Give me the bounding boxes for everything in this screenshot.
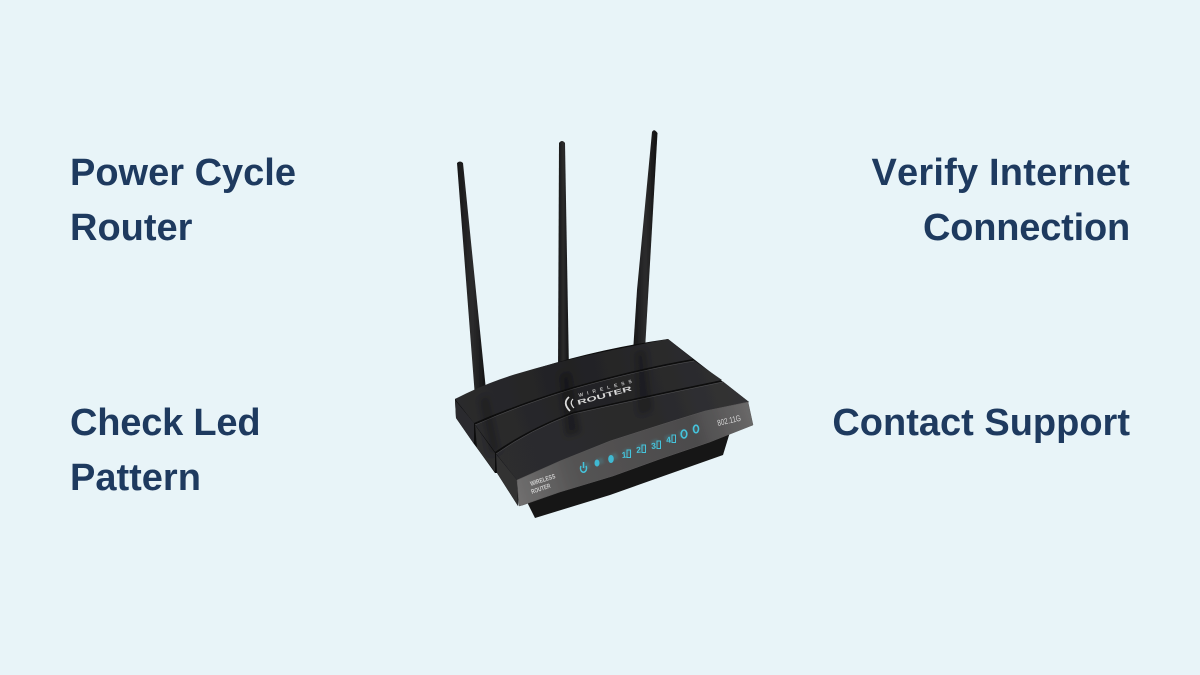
model label: 802.11G <box>716 413 742 428</box>
front panel label: ROUTER <box>530 483 552 496</box>
left side faces <box>455 400 474 444</box>
front panel <box>517 402 753 506</box>
left antenna <box>457 162 487 410</box>
top segment front <box>496 382 749 480</box>
label: power cycle router: Power Cycle <box>70 152 296 194</box>
LED globe <box>681 430 687 438</box>
LED port 4: 4 <box>666 434 672 445</box>
LED power <box>580 462 586 472</box>
label: power cycle router <box>70 152 296 249</box>
shell backing <box>455 339 749 506</box>
label: check led pattern: Check Led <box>70 402 260 444</box>
middle antenna <box>558 141 569 375</box>
label: power cycle router: Router <box>70 207 192 249</box>
label: check led pattern: Pattern <box>70 457 201 499</box>
top segment middle <box>475 360 722 452</box>
brand logo: ROUTER <box>577 386 633 407</box>
status LEDs <box>580 425 698 472</box>
router body <box>455 339 753 518</box>
front panel label: WIRELESS <box>529 473 557 488</box>
right antenna <box>633 130 658 352</box>
label: verify internet connection: Connection <box>923 207 1130 249</box>
LED glow <box>583 429 696 467</box>
brand logo <box>566 379 633 411</box>
LED bluetooth <box>608 455 614 463</box>
front panel label <box>529 473 557 496</box>
LED port 3: 3 <box>651 440 657 451</box>
LED wifi <box>594 460 600 466</box>
label: contact support: Contact Support <box>832 402 1130 444</box>
groove highlights <box>475 361 694 425</box>
label: check led pattern <box>70 402 260 499</box>
label: verify internet connection: Verify Internet <box>871 152 1130 194</box>
antenna reflections <box>480 396 500 454</box>
brand logo: WIRELESS <box>578 379 633 399</box>
LED port 2: 2 <box>636 444 642 455</box>
label: verify internet connection <box>871 152 1130 249</box>
LED port 1: 1 <box>621 450 627 460</box>
LED usb <box>694 425 698 433</box>
top segment back <box>455 339 693 423</box>
underside <box>525 425 730 518</box>
router with antennas <box>455 130 753 518</box>
